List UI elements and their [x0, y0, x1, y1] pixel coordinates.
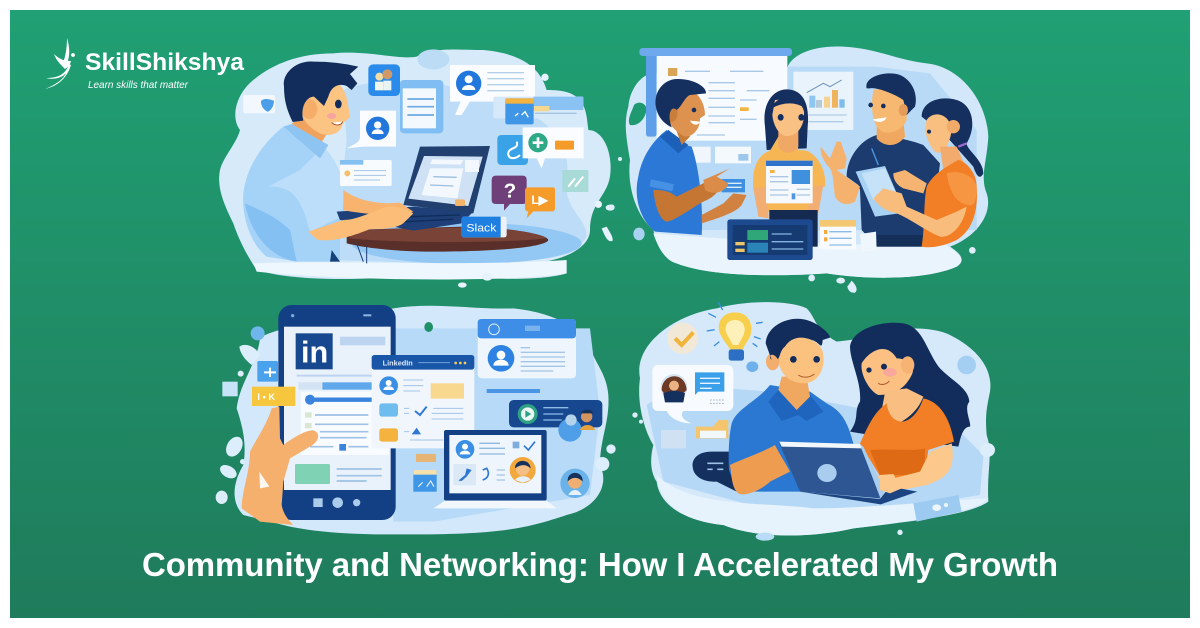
profile bubble left: [347, 111, 396, 148]
sticker: [252, 387, 295, 406]
icon: LinkedIn logo: in: [301, 336, 328, 370]
plus bubble: [523, 127, 584, 168]
tagline: Learn skills that matter: [88, 80, 189, 91]
held newsletter: [766, 161, 813, 203]
presentation board: [639, 48, 792, 141]
LinkedIn card: LinkedIn: [383, 358, 413, 367]
laptop: [779, 442, 917, 504]
cloud backdrop: [639, 302, 990, 535]
woman in orange tee: [850, 323, 970, 493]
slack badge: Slack: [466, 222, 497, 234]
green gap in cloud: [629, 103, 647, 125]
hair: [284, 62, 358, 122]
chart tile: [505, 98, 534, 124]
drops: [632, 412, 995, 541]
man in blue polo: [729, 319, 853, 494]
small cards: [690, 147, 751, 192]
icon: leaping figure: [45, 38, 75, 89]
drops: [458, 74, 614, 288]
profile bubble top: [450, 65, 535, 115]
sticker: I • K: [257, 392, 275, 402]
folder: [661, 420, 728, 448]
message bubble: [652, 365, 733, 423]
laptop: [433, 430, 557, 508]
title: Community and Networking: How I Accelerated My Growth: [142, 546, 1058, 583]
gadget tile: [913, 495, 962, 522]
orange bubble: L▶: [531, 193, 549, 207]
person: [243, 62, 358, 262]
teal note: [562, 170, 588, 192]
phone: [278, 305, 396, 520]
bar chart poster: [793, 72, 853, 130]
dark dashboard: [727, 219, 813, 260]
slack badge: [462, 217, 507, 237]
drops: [216, 345, 616, 504]
neck: [292, 112, 329, 147]
panel: person chatting on a laptop: [219, 49, 614, 288]
shirt: [243, 127, 345, 262]
hand: [242, 407, 318, 525]
cloud backdrop: [235, 306, 609, 534]
header strip right: [493, 97, 583, 118]
document bubble: [400, 80, 443, 133]
panel: LinkedIn on phone and laptop: [216, 305, 616, 534]
face: [300, 73, 350, 135]
small tiles: [413, 454, 437, 492]
video pill: [509, 400, 602, 442]
icon: LinkedIn logo: [296, 333, 333, 370]
brand name: SkillShikshya: [85, 50, 245, 76]
question bubble: [492, 176, 527, 211]
man in navy tee: [821, 73, 940, 247]
post card left: [340, 160, 392, 186]
cloud backdrop: [626, 46, 988, 278]
calendar: [820, 220, 877, 252]
icon: check badge: [667, 323, 698, 354]
profile window: [478, 319, 576, 391]
icon: team tile: [368, 64, 400, 96]
laptop: [337, 146, 490, 231]
cloud backdrop: [219, 49, 611, 279]
icon: link tile: [497, 135, 528, 165]
chat pill: [693, 452, 737, 492]
arms: [308, 190, 413, 240]
panel: two people with laptop: [632, 302, 995, 541]
table: [347, 227, 548, 263]
woman in yellow top: [753, 89, 825, 247]
panel: team collaborating: [609, 46, 988, 293]
tablet: [856, 166, 905, 217]
question bubble: ?: [504, 180, 516, 203]
green gap in cloud: [424, 322, 433, 332]
orange bubble: [525, 187, 555, 218]
collar: [283, 124, 328, 158]
woman in orange top: [873, 98, 983, 247]
icon: heart tile: [243, 95, 275, 113]
icon: light bulb: [707, 302, 763, 361]
LinkedIn card: [372, 355, 474, 448]
avatar: [560, 469, 590, 498]
drops: [609, 157, 976, 293]
man in blue shirt: [637, 79, 747, 235]
logo: SkillShikshya: [45, 38, 245, 91]
